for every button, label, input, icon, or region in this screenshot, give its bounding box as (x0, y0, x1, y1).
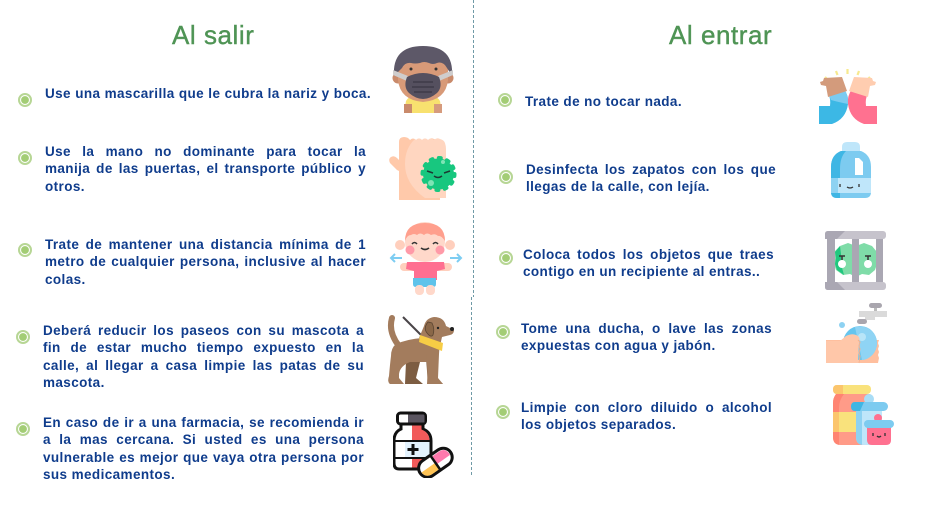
text: zapatos (526, 162, 776, 194)
heading: Al salir: Al salir (172, 20, 254, 50)
bullet: objetos (499, 251, 513, 265)
bullet: mascarilla (18, 93, 32, 107)
text: farmacia (43, 415, 364, 482)
text: mascota: mascota. (43, 375, 105, 390)
text: distancia (45, 237, 366, 287)
text: zapatos: Desinfecta los zapatos con los que (526, 162, 776, 177)
icon: hand with virus (389, 137, 456, 200)
text: cloro: Limpie con cloro diluido o alcohol (521, 400, 772, 415)
text: distancia: metro de cualquier persona, inclusive al hacer (45, 254, 366, 269)
icon: medicine bottle and pill (393, 412, 454, 478)
text: distancia: Trate de mantener una distancia mínima de 1 (45, 237, 366, 252)
text: cloro (521, 400, 772, 432)
icon: person with mask (392, 46, 454, 113)
text: ducha (521, 321, 772, 353)
icon: virus behind bars (825, 231, 886, 290)
bullet: no tocar (498, 93, 512, 107)
text: farmacia: sus medicamentos. (43, 467, 175, 482)
text: mascota: fin de estar mucho tiempo expuesto en la (43, 340, 364, 355)
icon: high five hands (819, 69, 877, 124)
text: cloro: los objetos separados. (521, 417, 676, 432)
text: mano: otros. (45, 179, 85, 194)
text: mano (45, 144, 366, 194)
text: distancia: colas. (45, 272, 86, 287)
icon: dog with leash (388, 315, 454, 384)
icon: washing hands under tap (826, 303, 887, 364)
icon: child showing distance (390, 222, 462, 295)
bullet: zapatos (499, 170, 513, 184)
bullet: distancia (18, 243, 32, 257)
text: objetos (523, 247, 774, 279)
bullet: cloro (496, 405, 510, 419)
text: farmacia: En caso de ir a una farmacia, se recomienda ir (43, 415, 364, 430)
text: mascarilla: Use una mascarilla que le cubra la nariz y boca. (45, 86, 371, 101)
text: mano: Use la mano no dominante para tocar la (45, 144, 366, 159)
text: zapatos: llegas de la calle, con lejía. (526, 179, 710, 194)
text: objetos: Coloca todos los objetos que traes (523, 247, 774, 262)
text: mano: manija de las puertas, el transporte público y (45, 161, 366, 176)
heading: Al entrar: Al entrar (669, 20, 772, 50)
text: objetos: contigo en un recipiente al entras.. (523, 264, 760, 279)
bullet: mascota (16, 330, 30, 344)
bullet: farmacia (16, 422, 30, 436)
icon: jars (833, 385, 894, 445)
text: mascota: calle, al llegar a casa limpie las patas de su (43, 358, 364, 373)
icon: bleach bottle (831, 142, 871, 198)
text: mascota: Deberá reducir los paseos con su mascota a (43, 323, 364, 338)
text: mascota (43, 323, 364, 390)
text: no tocar: Trate de no tocar nada. (525, 94, 682, 109)
text: ducha: expuestas con agua y jabón. (521, 338, 716, 353)
text: ducha: Tome una ducha, o lave las zonas (521, 321, 772, 336)
bullet: ducha (496, 325, 510, 339)
text: farmacia: a la mas cercana. Si usted es una persona (43, 432, 364, 447)
divider between the two columns (471, 0, 474, 475)
text: farmacia: vulnerable es mejor que vaya otra persona por (43, 450, 364, 465)
bullet: mano (18, 151, 32, 165)
